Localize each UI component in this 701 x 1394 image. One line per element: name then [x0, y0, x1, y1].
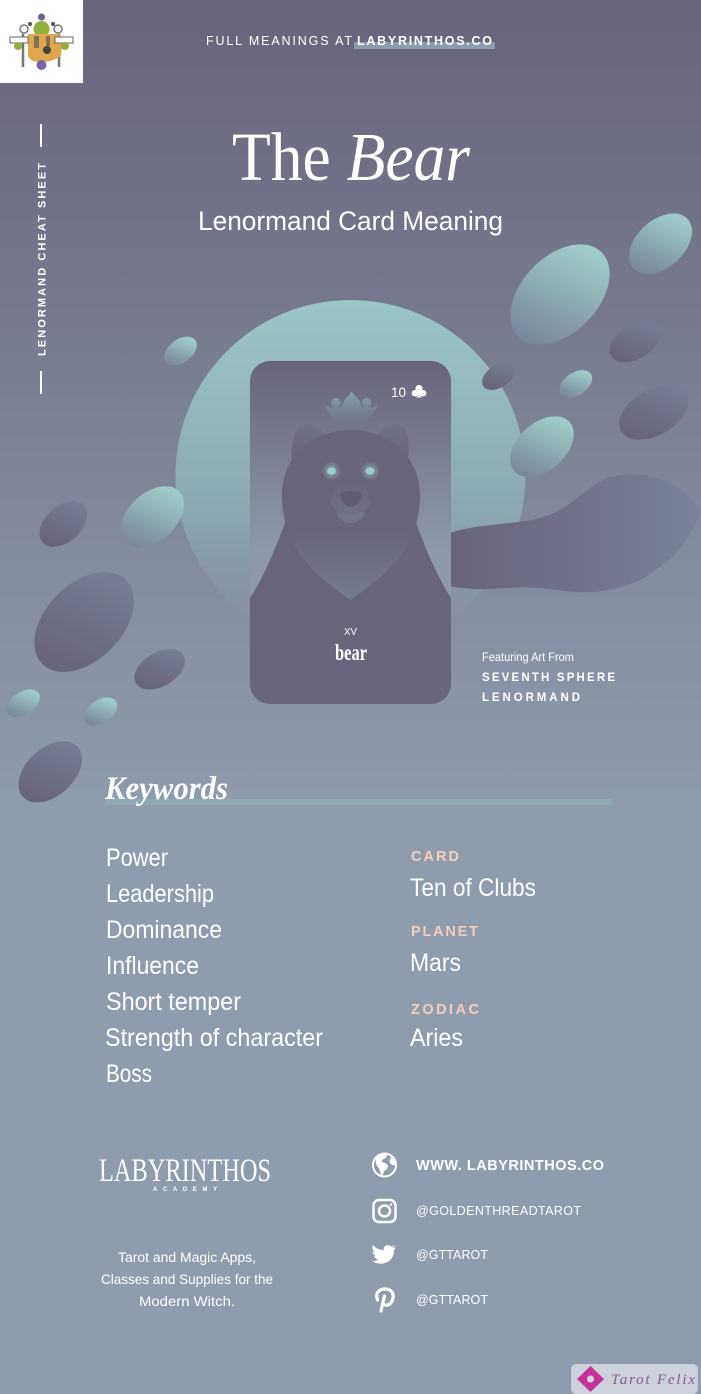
art credit: Featuring Art From [482, 652, 574, 664]
chin [337, 501, 364, 523]
academy wordmark [99, 1153, 271, 1193]
card name [335, 626, 367, 665]
card name: XV [344, 626, 357, 638]
academy tagline [101, 1249, 273, 1309]
card correspondences: CARD [411, 849, 459, 865]
card correspondences: Mars [410, 949, 461, 977]
keywords list: Short temper [106, 988, 241, 1016]
tarot felix badge: Tarot Felix [611, 1372, 695, 1388]
twitter row: @GTTAROT [416, 1248, 488, 1262]
card correspondences: Ten of Clubs [410, 874, 536, 902]
wave shape [451, 474, 701, 592]
pinterest row: @GTTAROT [416, 1293, 488, 1307]
logo crest [0, 0, 83, 83]
sidebar label: LENORMAND CHEAT SHEET [36, 163, 48, 356]
instagram row: @GOLDENTHREADTAROT [416, 1204, 581, 1218]
ears [292, 424, 409, 460]
academy tagline: Modern Witch. [139, 1293, 235, 1309]
website row: WWW. LABYRINTHOS.CO [416, 1158, 604, 1174]
art credit: LENORMAND [482, 692, 580, 704]
eyes [322, 461, 380, 481]
body [250, 523, 451, 704]
keywords heading: Keywords [104, 771, 228, 807]
sun circle [176, 300, 526, 650]
card correspondences: PLANET [411, 924, 478, 940]
academy wordmark: ACADEMY [153, 1187, 217, 1193]
card correspondences: ZODIAC [411, 1002, 480, 1018]
icon: globe [373, 1154, 396, 1176]
bear [250, 424, 451, 704]
keywords list: Power [106, 844, 168, 872]
keywords list: Influence [106, 952, 199, 980]
muzzle [331, 477, 370, 515]
keywords list: Dominance [106, 916, 222, 944]
keywords list: Leadership [106, 880, 214, 908]
keywords list: Strength of character [105, 1024, 323, 1052]
card number and club suit [391, 385, 426, 400]
icon: pinterest [377, 1289, 393, 1311]
card correspondences: Aries [410, 1024, 463, 1052]
card name: bear [335, 640, 367, 665]
crown [324, 392, 378, 422]
academy tagline: Classes and Supplies for the [101, 1271, 273, 1287]
icon: instagram [374, 1200, 396, 1222]
floating stones [7, 214, 692, 802]
keywords list [105, 844, 323, 1088]
academy tagline: Tarot and Magic Apps, [118, 1249, 256, 1265]
header link: FULL MEANINGS AT [206, 34, 352, 48]
header link [206, 34, 495, 49]
nose [340, 491, 362, 507]
card number and club suit: 10 [391, 385, 406, 400]
art credit: SEVENTH SPHERE [482, 672, 615, 684]
keywords heading [104, 771, 612, 807]
header link: LABYRINTHOS.CO [357, 34, 492, 48]
instagram row [374, 1200, 581, 1222]
card correspondences [410, 849, 536, 1052]
art credit [482, 652, 615, 704]
head and chest [282, 430, 420, 600]
icon: twitter [372, 1245, 396, 1264]
tarot felix badge [571, 1364, 698, 1394]
card [250, 361, 451, 704]
academy wordmark: LABYRINTHOS [99, 1153, 271, 1189]
twitter row [372, 1245, 488, 1264]
subtitle: Lenormand Card Meaning [198, 206, 503, 236]
keywords list: Boss [106, 1060, 152, 1088]
title: The Bear [232, 119, 471, 195]
website row [373, 1154, 604, 1176]
pinterest row [377, 1289, 488, 1311]
